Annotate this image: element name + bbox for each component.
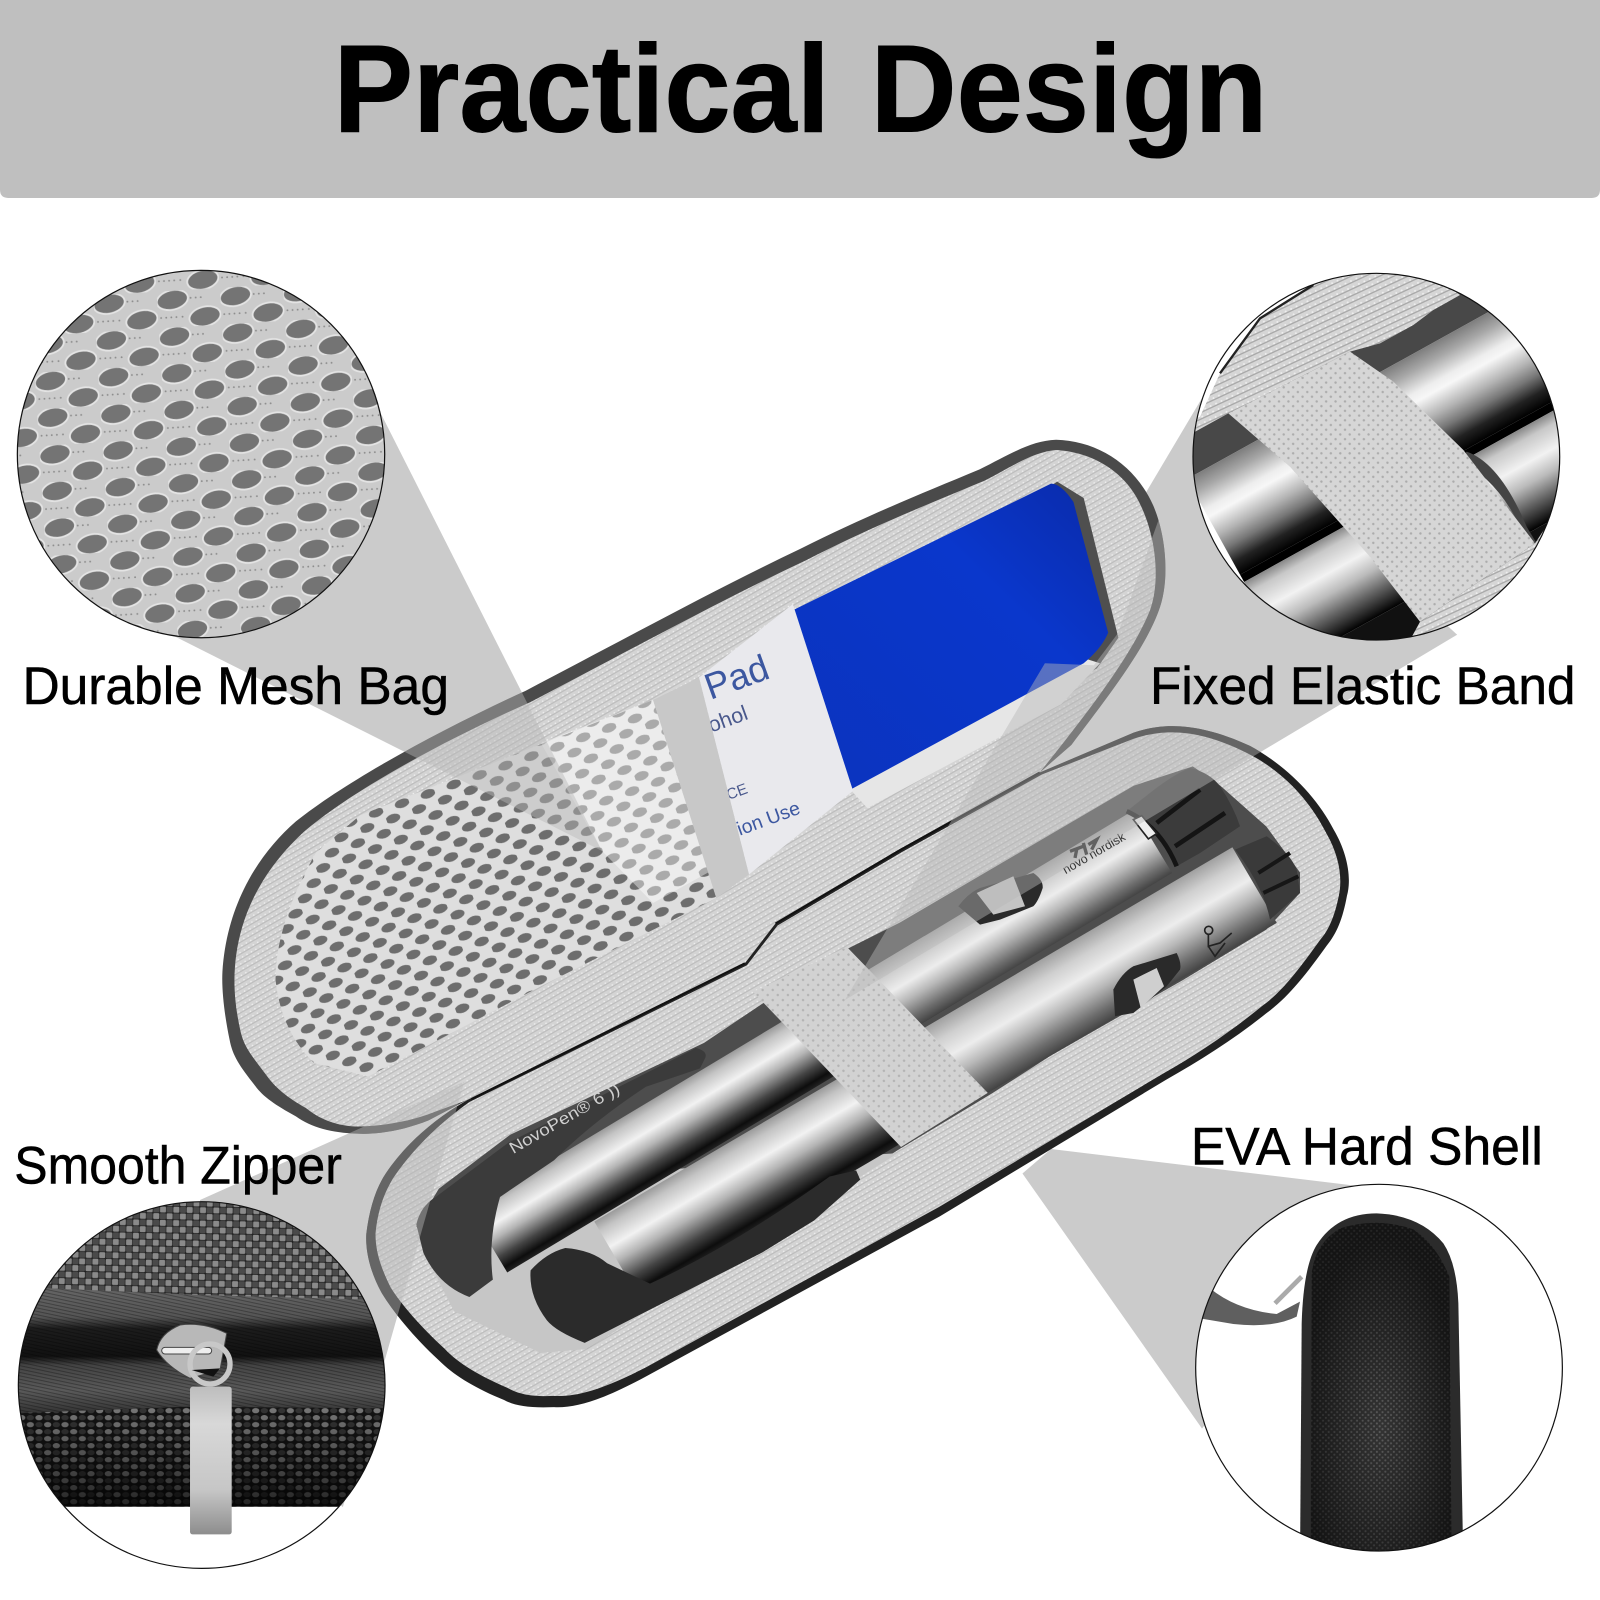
detail circle: mesh [17,270,385,638]
case base [366,726,1349,1407]
zipper tape [13,1287,387,1413]
lower pen dose window [1113,953,1180,1016]
lower binding [1412,530,1544,636]
zipper slider [157,1324,230,1384]
shell textured face [1311,1223,1452,1563]
shell rim [1300,1213,1463,1563]
pen: NovoPen lower [530,847,1277,1343]
silver barrel, lower half [469,936,962,1272]
black pen end and clip [416,1048,706,1297]
label: durable mesh bag: Durable Mesh Bag [22,657,449,716]
cartridge label [1133,816,1157,839]
black pen end and clip [530,1170,860,1343]
base fabric binding [376,732,1340,1396]
upper pen dose knob [1127,768,1240,866]
callout wedge: zipper [200,1082,464,1507]
black piping [1220,285,1313,373]
pad wording: CE mark: CE [724,781,750,804]
band strip [1228,352,1535,622]
woven top fabric [46,1202,364,1300]
lower pen dose knob [1235,836,1300,920]
clip brand text: NovoPen® 6 )) [506,1080,623,1158]
detail circle: hard shell [1196,1184,1562,1563]
zipper cord [1200,1288,1300,1325]
pen: NovoPen upper [416,810,1172,1297]
header banner [0,0,1600,198]
label: EVA hard shell: EVA Hard Shell [1191,1117,1543,1176]
upper pen dose window [958,873,1043,925]
callout overlay across the case [350,520,1260,1316]
label: fixed elastic band: Fixed Elastic Band [1150,657,1576,716]
lid dark backing [806,482,1118,794]
case lid [222,440,1165,1134]
pen details: windows, knobs and logos [958,768,1300,1016]
figure pictogram [1205,926,1232,956]
novo nordisk brand text: novo nordisk [1060,829,1128,877]
blue gel pack [793,484,1108,789]
seam between lid and base [471,772,1040,1099]
pad wording: alcohol fragment: ohol [705,701,751,737]
pad label [699,604,853,874]
elastic band [753,947,988,1147]
detail circle: elastic band [1192,272,1560,641]
white felt beneath gel pack [847,658,1100,808]
detail circle: zipper [13,1197,390,1573]
callout wedge: elastic band [845,398,1457,1000]
silver barrel, upper half [907,847,1277,1114]
pen shoulder [1466,452,1536,542]
dark felt interior [416,766,1300,1349]
pad wording: Pad [699,647,774,708]
woven bottom fabric [13,1403,390,1507]
pad wording: use fragment: ion Use [734,797,803,840]
mesh pocket [276,700,716,1077]
upper binding [1195,274,1460,432]
silver barrel, lower half [594,1000,1017,1297]
title: Practical Design [334,20,1267,159]
callout wedge: hard shell [1022,1149,1372,1429]
lighter area of mesh pocket [541,700,708,903]
zipper pull tab [190,1387,232,1534]
base zipper edge [366,726,1349,1407]
callout wedge: mesh bag [163,403,602,851]
lid zipper edge [222,440,1165,1134]
zipper pull [1275,1277,1302,1303]
light felt interior [416,1153,898,1353]
metal tubes [1194,292,1559,640]
label: smooth zipper: Smooth Zipper [14,1137,342,1196]
lid fabric binding [234,450,1156,1127]
open insulin pen case [222,440,1349,1407]
silver barrel, upper half [850,810,1172,1044]
outside white corner [1198,288,1306,418]
pocket binding strip [653,678,749,898]
novo nordisk logo [1070,840,1097,858]
